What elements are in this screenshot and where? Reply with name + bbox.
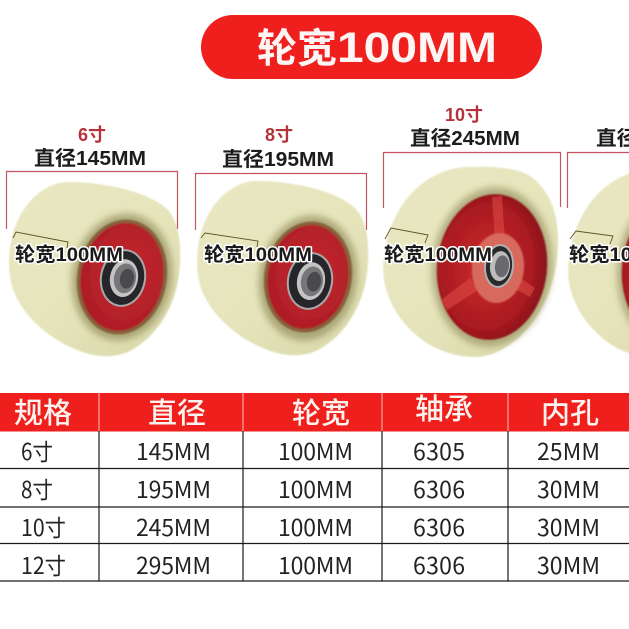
row: 12 inch: [21, 547, 600, 581]
row: 12 inch: 12寸: [21, 547, 66, 581]
table header: 内孔: [541, 390, 599, 432]
size label: 6 inch: 6寸: [78, 125, 106, 145]
table header: 规格: [14, 390, 72, 432]
table header: 轮宽: [292, 390, 350, 432]
row: 6 inch: 145MM: [136, 433, 211, 467]
diameter label: 8 inch: 直径195MM: [222, 148, 334, 171]
row: 12 inch: 295MM: [136, 547, 211, 581]
dimension bracket: 12 inch: [568, 152, 629, 208]
table header: 直径: [148, 390, 206, 432]
title pill: 轮宽100MM: [257, 24, 497, 72]
diameter label: 6 inch: 直径145MM: [34, 147, 146, 170]
table grid: [0, 431, 629, 581]
width label: 10 inch: 轮宽100MM: [384, 243, 492, 266]
row: 10 inch: 10寸: [21, 509, 66, 543]
diameter label: 10 inch: 直径245MM: [410, 127, 520, 150]
width tick: 8 inch: [201, 233, 258, 247]
row: 6 inch: 100MM: [278, 433, 353, 467]
row: 10 inch: 100MM: [278, 509, 353, 543]
wheel: 6 inch: [9, 182, 182, 356]
bearing: [282, 248, 338, 314]
row: 8 inch: 30MM: [537, 471, 600, 505]
row: 10 inch: 30MM: [537, 509, 600, 543]
width tick: 12 inch: [570, 231, 613, 244]
row: 8 inch: 8寸: [21, 471, 53, 505]
table header: [0, 386, 629, 432]
row: 12 inch: 30MM: [537, 547, 600, 581]
row: 8 inch: 100MM: [278, 471, 353, 505]
hub: [468, 230, 528, 306]
size label: 8 inch: 8寸: [265, 125, 293, 145]
row: 8 inch: 6306: [413, 471, 465, 505]
width tick: 6 inch: [13, 232, 68, 248]
spokes: [441, 196, 535, 310]
row: 12 inch: 6306: [413, 547, 465, 581]
wheel: 12 inch (cropped): [568, 169, 629, 359]
dimension bracket: 10 inch: [384, 152, 560, 208]
row: 8 inch: [21, 471, 600, 505]
bearing: [482, 243, 516, 289]
row: 12 inch: 100MM: [278, 547, 353, 581]
dimension bracket: 6 inch: [6, 172, 178, 229]
row: 10 inch: [21, 509, 600, 543]
row: 6 inch: [21, 433, 600, 467]
row: 10 inch: 245MM: [136, 509, 211, 543]
width label: 8 inch: 轮宽100MM: [204, 243, 312, 266]
row: 6 inch: 25MM: [537, 433, 600, 467]
width tick: 10 inch: [385, 228, 428, 243]
table header: 轴承: [415, 386, 473, 428]
width label: 6 inch: 轮宽100MM: [15, 243, 123, 266]
specification table: [0, 386, 629, 581]
row: 10 inch: 6306: [413, 509, 465, 543]
row: 6 inch: 6305: [413, 433, 465, 467]
dimension bracket: 8 inch: [196, 174, 366, 230]
size label: 10 inch: 10寸: [445, 105, 483, 125]
row: 8 inch: 195MM: [136, 471, 211, 505]
wheel: 8 inch: [197, 181, 368, 355]
row: 6 inch: 6寸: [21, 433, 53, 467]
bearing: [95, 245, 151, 311]
wheel: 10 inch: [383, 167, 560, 357]
title pill: [201, 15, 542, 79]
